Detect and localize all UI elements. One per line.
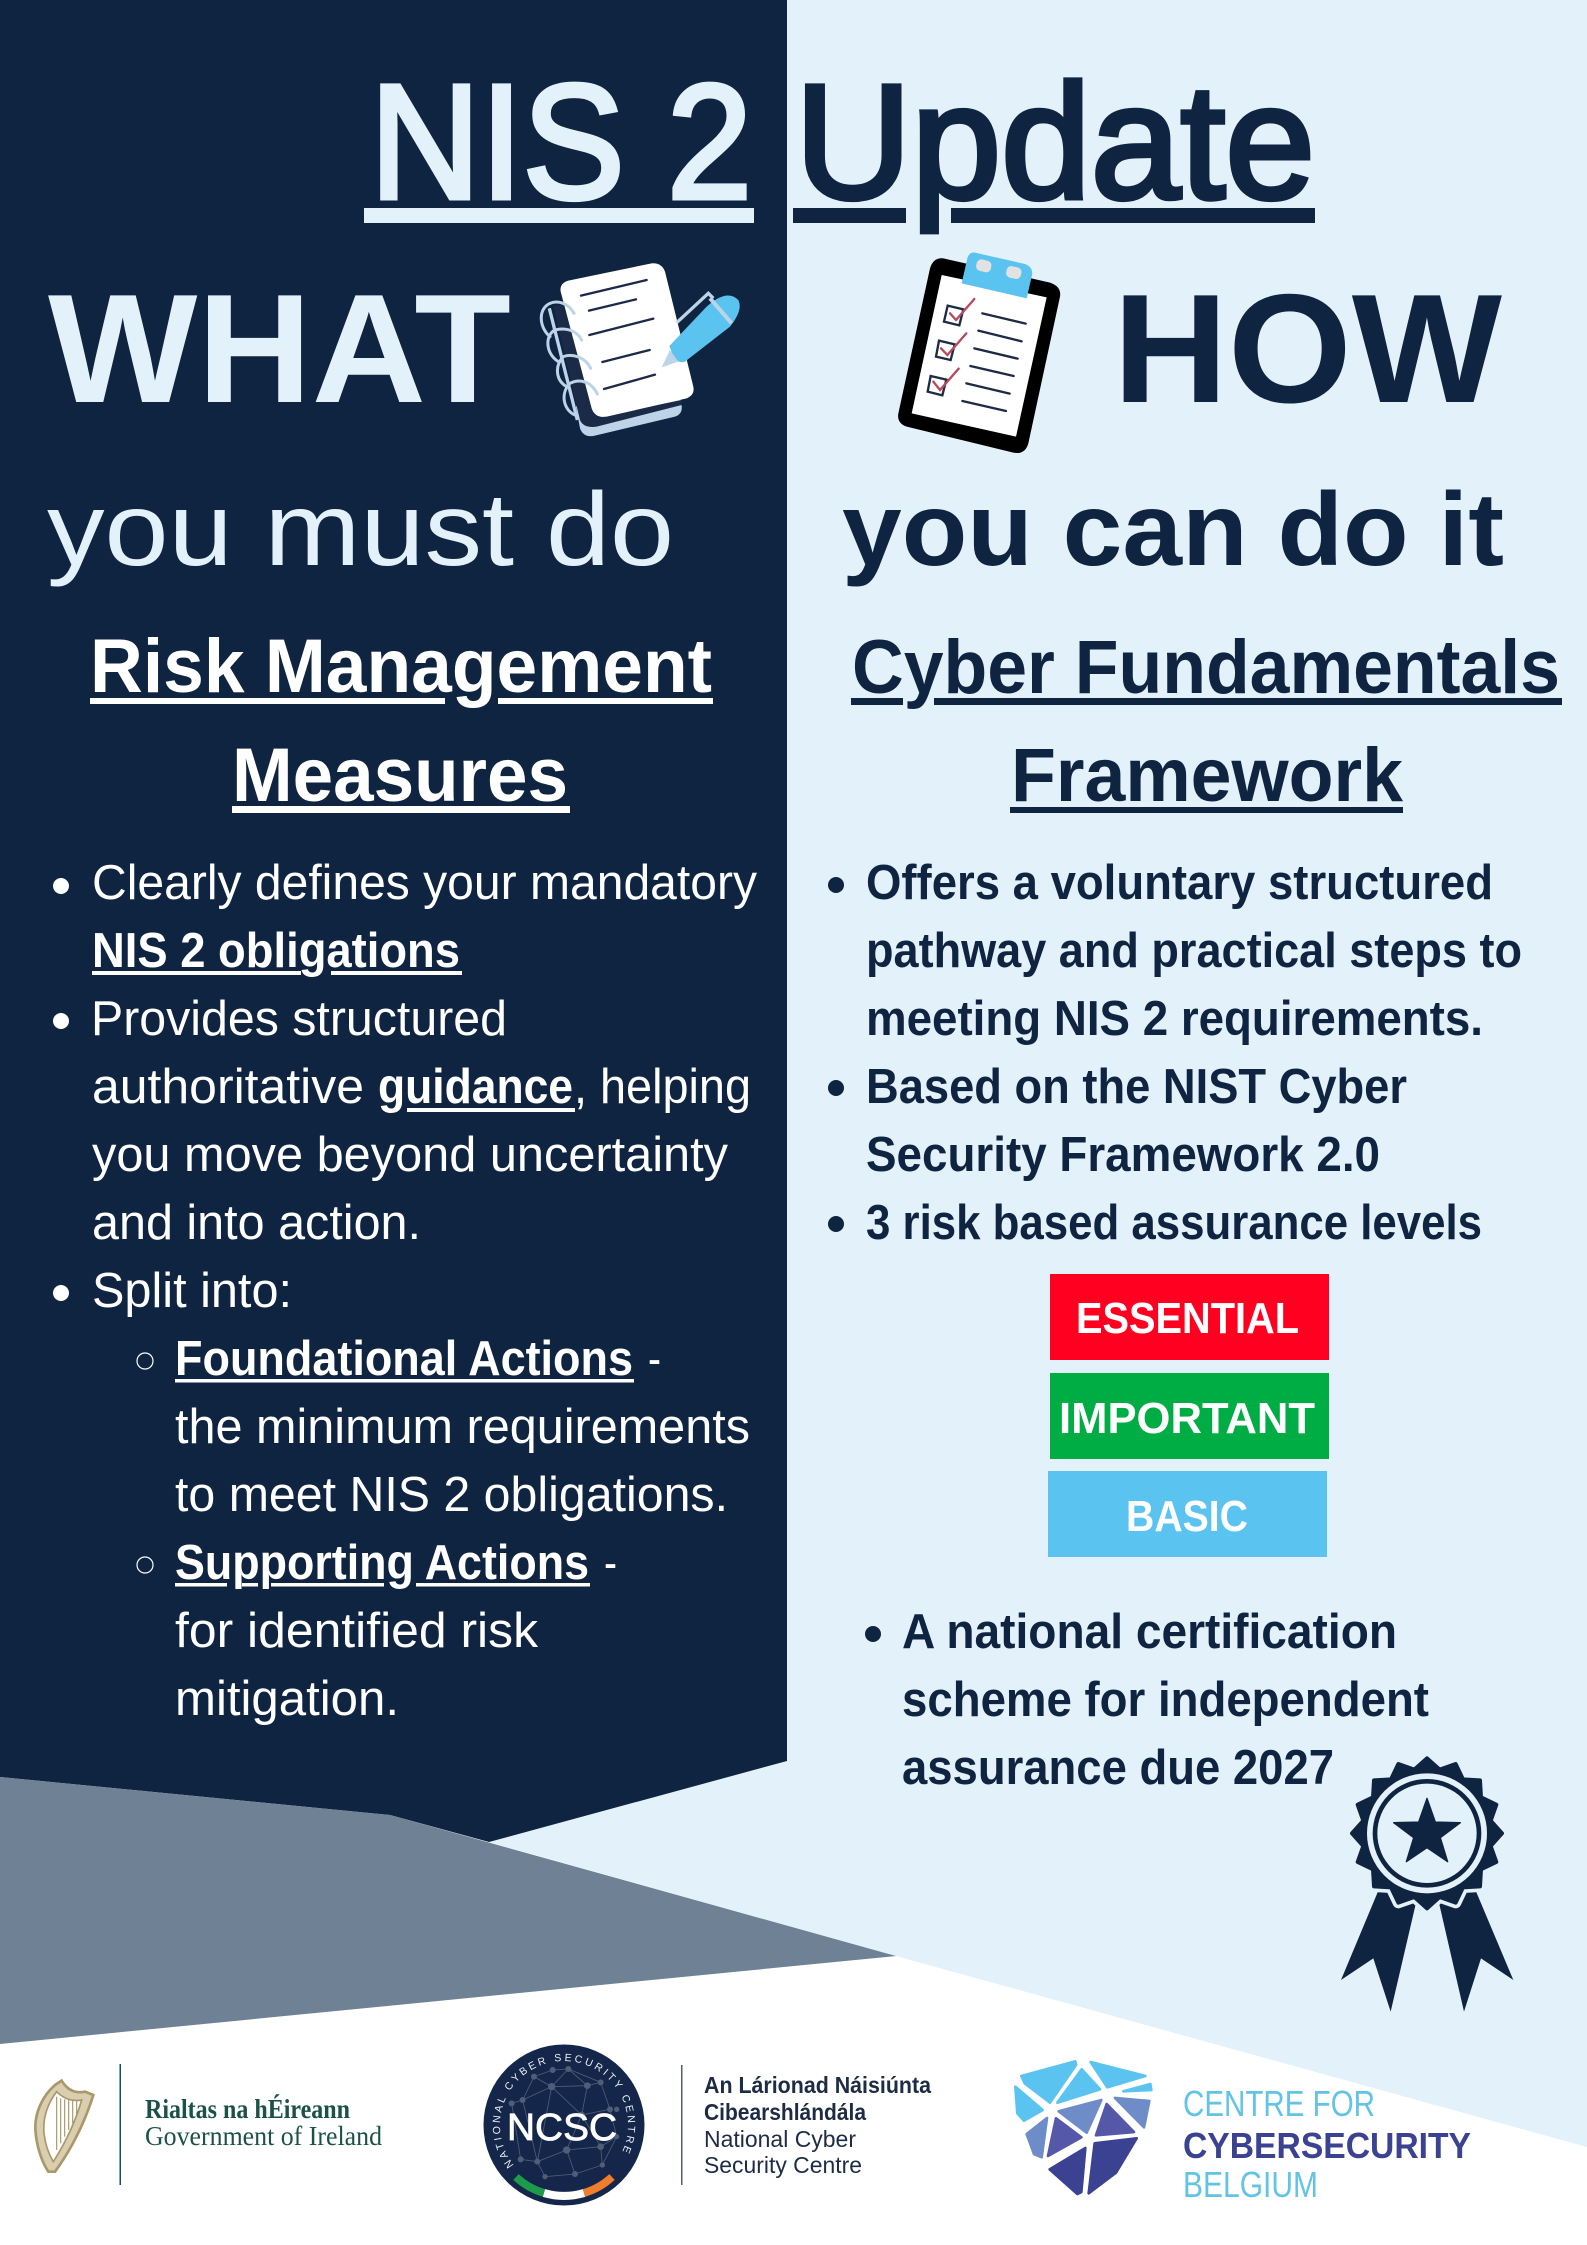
bullet: NIST framework: Based on the NIST Cyber xyxy=(866,1060,1407,1114)
text block: what you must do list xyxy=(53,856,757,1726)
bullet: split into actions xyxy=(53,1264,750,1726)
heading: Cyber Fundamentals Framework xyxy=(851,625,1562,818)
bullet: authoritative guidance: guidance xyxy=(378,1060,573,1114)
bullet: national certification scheme xyxy=(865,1605,1429,1795)
badge: IMPORTANT xyxy=(1050,1373,1329,1459)
panel: grey angled band xyxy=(0,1777,896,2044)
badge: BASIC xyxy=(1048,1471,1327,1557)
heading: Cyber Fundamentals Framework: Framework xyxy=(1011,733,1404,818)
bullet: authoritative guidance: , helping xyxy=(574,1060,751,1114)
logo: Centre for Cybersecurity Belgium xyxy=(1015,2061,1471,2205)
bullet: voluntary pathway xyxy=(828,856,1522,1046)
bullet: split into actions: for identified risk xyxy=(175,1604,539,1658)
heading: Risk Management Measures: Measures xyxy=(232,733,568,818)
heading: Cyber Fundamentals Framework: Cyber Fundamentals xyxy=(852,625,1560,710)
bullet: authoritative guidance: you move beyond uncertainty xyxy=(92,1128,728,1182)
title: NIS 2 xyxy=(370,50,752,233)
panel: dark left background xyxy=(0,0,787,1842)
icon: clipboard checklist xyxy=(898,253,1060,453)
logo: National Cyber Security Centre: National Cyber xyxy=(704,2126,856,2152)
logo: National Cyber Security Centre: Cibearshlándála xyxy=(704,2099,866,2125)
bullet: split into actions: Foundational Actions xyxy=(175,1332,633,1386)
title xyxy=(364,50,1315,233)
badge: ESSENTIAL xyxy=(1050,1274,1329,1360)
bullet: split into actions: - xyxy=(648,1332,661,1386)
subheading: you can do it: you can do it xyxy=(842,472,1504,588)
icon: notebook and pen xyxy=(541,263,740,436)
bullet: voluntary pathway: meeting NIS 2 requirements. xyxy=(866,992,1483,1046)
bullet: split into actions: - xyxy=(604,1536,617,1590)
logo: Government of Ireland: Rialtas na hÉireann xyxy=(145,2094,350,2124)
icon: award rosette with ribbons xyxy=(1341,1758,1513,2012)
panel: light right background xyxy=(489,0,1587,2147)
icon: NCSC roundel: NCSC xyxy=(507,2107,617,2149)
subheading: you must do: you must do xyxy=(47,472,674,588)
bullet: national certification scheme: assurance due 2027 xyxy=(902,1741,1334,1795)
bullet: mandatory obligations: NIS 2 obligations xyxy=(92,924,460,978)
heading: WHAT: WHAT xyxy=(48,262,511,435)
logo: Government of Ireland xyxy=(35,2064,382,2185)
bullet: assurance levels: 3 risk based assurance levels xyxy=(866,1196,1482,1250)
badge: BASIC: BASIC xyxy=(1126,1492,1248,1541)
bullet: split into actions: the minimum requirements xyxy=(175,1400,750,1454)
bullet: split into actions: Supporting Actions xyxy=(175,1536,589,1590)
bullet: mandatory obligations: Clearly defines your mandatory xyxy=(92,856,757,910)
bullet: authoritative guidance: and into action. xyxy=(92,1196,421,1250)
logo: Centre for Cybersecurity Belgium: CENTRE FOR xyxy=(1183,2083,1375,2124)
bullet: voluntary pathway: Offers a voluntary structured xyxy=(866,856,1493,910)
badge: IMPORTANT: IMPORTANT xyxy=(1059,1394,1315,1443)
logo: Centre for Cybersecurity Belgium: BELGIUM xyxy=(1183,2164,1318,2205)
bullet: split into actions: to meet NIS 2 obligations. xyxy=(175,1468,728,1522)
icon: faceted shield xyxy=(1015,2061,1151,2194)
logo: Centre for Cybersecurity Belgium: CYBERSECURITY xyxy=(1183,2125,1471,2166)
heading: Risk Management Measures xyxy=(90,624,713,818)
badge: ESSENTIAL: ESSENTIAL xyxy=(1076,1294,1299,1343)
bullet: mandatory obligations xyxy=(53,856,757,978)
bullet: NIST framework xyxy=(828,1060,1407,1182)
bullet: authoritative guidance: Provides structured xyxy=(91,992,507,1046)
bullet: voluntary pathway: pathway and practical steps to xyxy=(866,924,1522,978)
bullet: national certification scheme: scheme for independent xyxy=(902,1673,1429,1727)
icon: Irish harp xyxy=(35,2081,93,2172)
icon: NCSC roundel xyxy=(484,2044,644,2206)
heading: HOW: HOW xyxy=(1113,262,1503,435)
bullet: split into actions: Split into: xyxy=(92,1264,292,1318)
bullet: NIST framework: Security Framework 2.0 xyxy=(866,1128,1380,1182)
bullet: national certification scheme: A national certification xyxy=(902,1605,1397,1659)
icon: NCSC roundel: NATIONAL CYBER SECURITY CENTRE xyxy=(492,2054,636,2169)
logo: National Cyber Security Centre: An Lárionad Náisiúnta xyxy=(704,2072,931,2098)
bullet: authoritative guidance xyxy=(53,992,751,1250)
logo: National Cyber Security Centre xyxy=(484,2044,932,2206)
text block: how you can do it list xyxy=(828,856,1522,1250)
bullet: authoritative guidance: authoritative xyxy=(92,1060,364,1114)
heading: Risk Management Measures: Risk Management xyxy=(90,624,712,709)
bullet: split into actions: mitigation. xyxy=(175,1672,399,1726)
title: Update xyxy=(795,50,1315,233)
logo: Government of Ireland: Government of Ireland xyxy=(145,2121,382,2151)
logo: National Cyber Security Centre: Security Centre xyxy=(704,2152,862,2178)
